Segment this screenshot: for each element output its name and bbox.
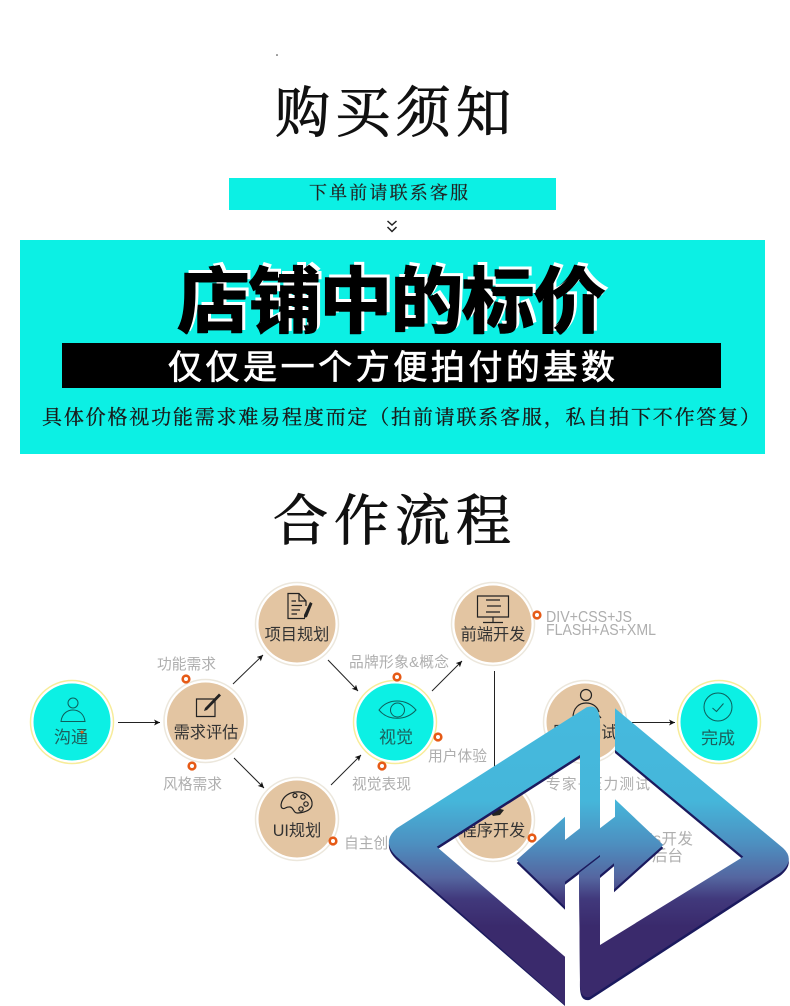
heading: 店铺中的标价: 店铺中的标价 <box>177 263 605 343</box>
heading: 店铺中的标价: 店铺中的标价 <box>181 260 609 340</box>
node: 前端开发 <box>452 582 534 666</box>
node: 程序开发 <box>452 778 534 862</box>
banner: contact customer service: 下单前请联系客服 <box>309 183 468 203</box>
title: 合作流程: 合作流程 <box>273 491 511 552</box>
panel: price notice <box>20 240 765 454</box>
node: 压力测试 <box>544 680 626 764</box>
heading: 店铺中的标价: 店铺中的标价 <box>178 263 606 343</box>
node: UI规划 <box>256 778 338 860</box>
annotations: 功能需求 <box>157 656 216 673</box>
logo overlay <box>389 707 789 1006</box>
node: 完成: 完成 <box>701 729 735 748</box>
arrows <box>118 655 675 800</box>
node: 前端开发: 前端开发 <box>461 626 525 644</box>
annotations: DIV+CSS+JS <box>546 609 632 626</box>
node: 项目规划: 项目规划 <box>265 626 329 644</box>
title: 购买须知: 购买须知 <box>275 83 511 144</box>
node: UI规划: UI规划 <box>273 822 321 840</box>
logo right band <box>579 708 789 997</box>
marker dots <box>183 612 540 844</box>
subheading bar <box>62 343 721 388</box>
node: 需求评估 <box>164 680 247 762</box>
logo left band <box>389 707 600 1005</box>
annotations: 品牌形象&概念 <box>349 653 449 671</box>
icon: double chevron down <box>388 221 396 232</box>
node: 视觉 <box>354 680 436 764</box>
node: 程序开发: 程序开发 <box>461 822 525 840</box>
annotations: 自主创意 <box>344 834 403 852</box>
node: 视觉: 视觉 <box>379 728 413 747</box>
flowchart <box>30 582 760 865</box>
note text: 具体价格视功能需求难易程度而定（拍前请联系客服，私自拍下不作答复） <box>42 406 760 429</box>
annotations: 专家+压力测试 <box>546 776 650 793</box>
annotations: 视觉表现 <box>352 776 411 793</box>
node: 沟通: 沟通 <box>54 728 88 747</box>
subheading bar: 仅仅是一个方便拍付的基数 <box>168 349 615 387</box>
node: 压力测试: 压力测试 <box>553 724 617 742</box>
annotations: Js开发 <box>645 830 693 848</box>
node: 完成 <box>678 680 760 764</box>
node: 项目规划 <box>256 582 338 666</box>
annotations: 用户体验 <box>428 748 487 765</box>
annotations: 后台 <box>652 847 683 865</box>
annotations: 风格需求 <box>163 776 222 793</box>
annotations <box>157 609 693 865</box>
logo shadow <box>389 710 789 1006</box>
node: 沟通 <box>30 680 114 764</box>
logo right arrow <box>600 799 663 889</box>
annotations: FLASH+AS+XML <box>546 622 656 639</box>
banner: contact customer service <box>229 178 556 210</box>
node: 需求评估: 需求评估 <box>174 724 238 742</box>
speck <box>276 54 278 56</box>
